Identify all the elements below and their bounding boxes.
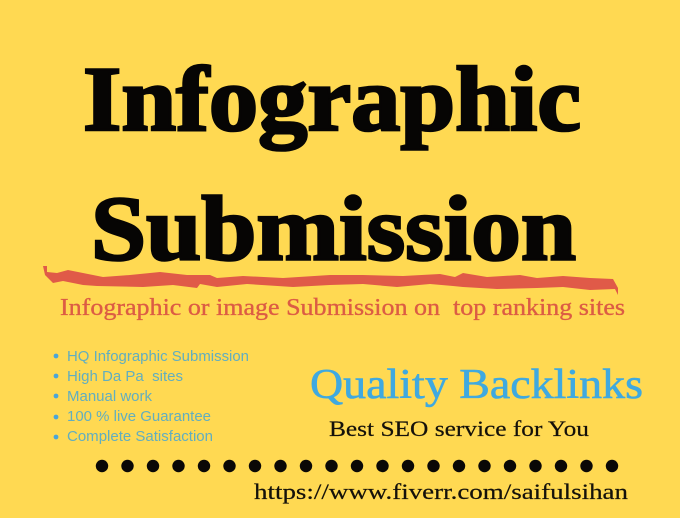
url: https://www.fiverr.com/saifulsihan <box>254 479 628 504</box>
title: Submission: Submission <box>91 178 576 280</box>
bullet: HQ Infographic Submission: HQ Infographic Submission <box>67 349 249 365</box>
dotted divider <box>96 460 618 472</box>
subtitle: Infographic or image Submission on top ranking sites <box>60 295 625 321</box>
bullet: 100 % live Guarantee: 100 % live Guarantee <box>67 409 211 425</box>
tagline: Best SEO service for You <box>329 416 589 441</box>
bullet: Complete Satisfaction: Complete Satisfaction <box>67 429 213 445</box>
title: Infographic: Infographic <box>83 48 581 150</box>
bullet: High Da Pa sites: High Da Pa sites <box>67 369 183 385</box>
brush underline <box>43 266 618 295</box>
feature bullet list <box>54 349 249 445</box>
bullet: Manual work: Manual work <box>67 389 153 405</box>
heading: Quality Backlinks: Quality Backlinks <box>310 362 643 408</box>
